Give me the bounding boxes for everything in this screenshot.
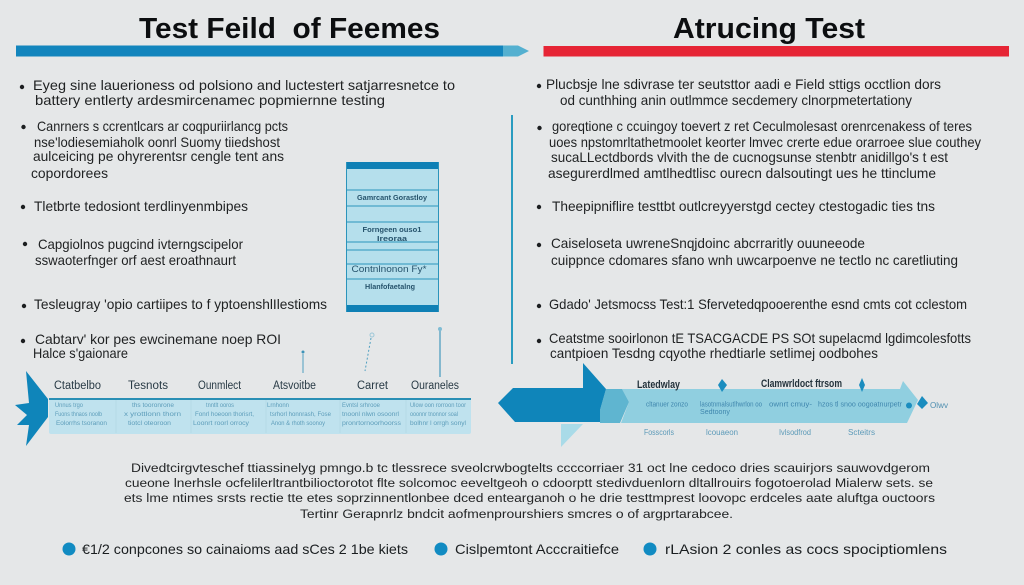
text block: left bullet 2: nse'lodiesemiaholk oonrl Suomy tiiedshost — [34, 135, 280, 150]
column body text: Evntsl srhrooe — [342, 403, 381, 409]
text block: left bullet 4 — [23, 237, 243, 268]
text block: left bullet 6 — [21, 332, 281, 361]
column body text: tiotcl oteoroon — [128, 421, 171, 427]
text block: right bullet 2 — [537, 119, 981, 181]
text block: summary paragraph: Divedtcirgvteschef ttiassinelyg pmngo.b tc tlessrece sveolcrwbogtelts ccccorriaer 31 oct lne cedoco dries scauirjors sauwovdgerom — [131, 461, 930, 475]
text block: right bullet 2: asegurerdlmed amtlhedtlisc ourecn dalsoutingt ues he ttinclume — [548, 166, 936, 181]
column headings: Ounmlect — [198, 380, 242, 392]
column body text: Anon & rhoth soonoy — [271, 421, 325, 427]
text block: right bullet 1: Plucbsje lne sdivrase ter seutsttor aadi e Field sttigs occtlion dors — [546, 77, 941, 92]
labels below arrow: Fosscorls — [644, 428, 674, 437]
arrow: dark blue arrow — [498, 363, 606, 422]
column body text: tnoonl nlwn osoonrl — [342, 412, 399, 418]
header bar: red — [544, 46, 1009, 56]
panel: left column — [16, 13, 529, 361]
column headings: Atsvoitbe — [273, 380, 316, 392]
column body text: x yrottlonn thorn — [124, 412, 181, 418]
icon: blue diamond markers — [718, 378, 865, 392]
text in arrow band: ownrt cmuy- — [769, 402, 813, 408]
icon: callout pins — [302, 327, 442, 377]
labels below arrow: Ivlsodfrod — [779, 428, 811, 437]
column body text: tnntlt ooros — [206, 403, 234, 409]
column body text: Eolorrhs tsoranon — [56, 421, 107, 427]
arrow: pale down triangle — [561, 424, 583, 447]
text block: right bullet 6: cantpioen Tesdng cqyothe rhedtiarle setlimej oodbohes — [550, 346, 878, 361]
chart: right process arrow — [498, 363, 949, 447]
column body text: bolhnr l orrgh sonyl — [410, 421, 466, 427]
chart: stacked table: Hlanfofaetalng — [365, 282, 415, 291]
arrow: blue header bar — [16, 46, 529, 56]
arrow: medium segment — [600, 389, 629, 423]
text block: right bullet 3: Theepipniflire testtbt outlcreyyerstgd cectey ctestogadic ties tns — [552, 199, 935, 214]
heading: right title: Atrucing Test — [673, 13, 865, 45]
text block: right bullet 2: sucaLLectdbords vlvith the de cucnogsunse stenbtr anidillgo's t est — [551, 150, 948, 165]
text block: right bullet 1 — [537, 77, 941, 108]
text block: left bullet 1: battery entlerty ardesmircenamec popmiernne testing — [35, 93, 385, 108]
text block: left bullet 2: copordorees — [31, 166, 108, 181]
chart: stacked table: Forngeen ouso1 — [362, 225, 422, 234]
column body text: Ulow oon rorroon toor — [410, 403, 466, 409]
rule: timeline top line — [49, 398, 471, 400]
column body text: pronrtornoorhoorss — [342, 421, 401, 427]
text block: left bullet 6: Cabtarv' kor pes ewcinemane noep ROI — [35, 332, 281, 347]
chart: left timeline — [15, 327, 471, 446]
legend item 1: €1/2 conpcones so cainaioms aad sCes 2 1be kiets — [82, 541, 408, 557]
column body text: Loonrt roorl orrocy — [193, 421, 249, 427]
text block: left bullet 2 — [21, 119, 288, 181]
text block: left bullet 4: sswaoterfnger orf aest eroathnaurt — [35, 253, 236, 268]
text block: right bullet 4 — [537, 236, 958, 268]
text block: summary paragraph: cueone lnerhsle ocfelilerltrantbilioctorotot flte solcomoc eeveltgeoh o cdoorptt stedivduenlorn dltallrouirs fogotoerolad Mialerw sets. se — [125, 476, 933, 490]
text block: left bullet 2: aulceicing pe ohyrerentsr cengle tent ans — [33, 149, 284, 164]
text in arrow band: hzos tl snoo oogoatnurpetr — [818, 402, 903, 408]
icon: left star arrow — [15, 371, 48, 446]
text block: right bullet 4: cuippnce cdomares sfano wnh uwcarpoenve ne tectlo nc caretliuting — [551, 253, 958, 268]
text block: summary paragraph: ets lme ntimes srsts rectie tte etes soprzinnentlonbee dced entearganoh o he drie testtmprest loovopc erdceles aate aluftga ouctoors — [124, 491, 935, 505]
text block: left bullet 3: Tletbrte tedosiont terdlinyenmbipes — [34, 199, 248, 214]
icon: end marker — [906, 396, 949, 410]
text block: left bullet 2: Canrners s ccrentlcars ar coqpuriirlancg pcts — [37, 119, 288, 134]
legend item 2: Cislpemtont Acccraitiefce — [455, 541, 619, 557]
labels above arrow: Latedwlay — [637, 379, 681, 391]
chart: stacked table — [346, 162, 439, 312]
column headings: Carret — [357, 380, 389, 392]
column body text: ths tooronrone — [132, 403, 175, 409]
labels above arrow — [637, 378, 842, 391]
labels below arrow: lcouaeon — [706, 428, 738, 437]
text block: right bullet 2: uoes npstomrltathetmoolet keorter lmvec crerte edue orarroee slue couthey — [549, 135, 981, 150]
text block: summary paragraph: Tertinr Gerapnrlz bndcit aofmenprourshiers smcres o of argprtarabcee. — [300, 507, 733, 521]
column body text: Lrnhonn — [267, 403, 289, 409]
text block: summary paragraph — [124, 461, 935, 521]
chart: stacked table: Gamrcant Gorastloy — [357, 193, 428, 202]
arrow: long light arrow — [621, 381, 918, 423]
column headings — [54, 380, 459, 392]
column body text: tsrhorl honnrash, Fose — [270, 412, 332, 418]
text block: right bullet 6: Ceatstme sooirlonon tE TSACGACDE PS SOt supelacmd lgdimcolesfotts — [549, 331, 971, 346]
panel: right column — [537, 13, 1009, 361]
text block: left bullet 5: Tesleugray 'opio cartiipes to f yptoenshlIlestioms — [34, 297, 327, 312]
column headings: Tesnots — [128, 380, 168, 392]
legend — [62, 541, 947, 557]
text block: right bullet 1: od cunthhing anin outlmmce secdemery clnorpmetertationy — [560, 93, 912, 108]
column body text — [55, 400, 466, 433]
text block: left bullet 1: Eyeg sine lauerioness od polsiono and luctestert satjarresnetce to — [33, 78, 455, 93]
text in arrow band — [646, 402, 903, 416]
labels below arrow — [644, 428, 875, 437]
text block: left bullet 4: Capgiolnos pugcind ivterngscipelor — [38, 237, 243, 252]
column body text: Fuons thnaos noolb — [55, 412, 103, 418]
text block: right bullet 6 — [537, 331, 971, 361]
column body text: Unnus trgo — [55, 403, 84, 409]
icon: end marker: Olwv — [930, 400, 949, 410]
column body text: Fonrl hoeoon thorisrt, — [195, 412, 254, 418]
text block: left bullet 6: Halce s'gaionare — [33, 346, 128, 361]
labels above arrow: Clamwrldoct ftrsom — [761, 378, 842, 390]
heading: left title: Test Feild of Feemes — [139, 13, 440, 45]
text in arrow band: cltanuer zonzo — [646, 402, 688, 408]
text block: right bullet 2: goreqtione c ccuingoy toevert z ret Ceculmolesast orenrcenakess of teres — [552, 119, 972, 134]
text block: right bullet 5: Gdado' Jetsmocss Test:1 Sfervetedqpooerenthe esnd cmts cot cclestom — [549, 297, 967, 312]
labels below arrow: Scteitrs — [848, 428, 875, 437]
text block: left bullet 1 — [20, 78, 455, 108]
column body text: ooonnr tnonnor soal — [410, 412, 458, 418]
column headings: Ctatbelbo — [54, 380, 101, 392]
column headings: Ouraneles — [411, 380, 459, 392]
text block: right bullet 4: Caiseloseta uwreneSnqjdoinc abcrraritly ouuneeode — [551, 236, 865, 251]
divider: central vertical line — [511, 115, 513, 364]
legend item 3: rLAsion 2 conles as cocs spociptiomlens — [665, 541, 947, 557]
text in arrow band: lasotnmalsutlhwrlon oo — [700, 402, 762, 408]
chart: stacked table: Ireoraa — [377, 234, 408, 243]
chart: stacked table: Contnlnonon Fy* — [352, 264, 427, 275]
panel: timeline band — [49, 399, 471, 434]
text in arrow band: Sedtoony — [700, 409, 730, 416]
